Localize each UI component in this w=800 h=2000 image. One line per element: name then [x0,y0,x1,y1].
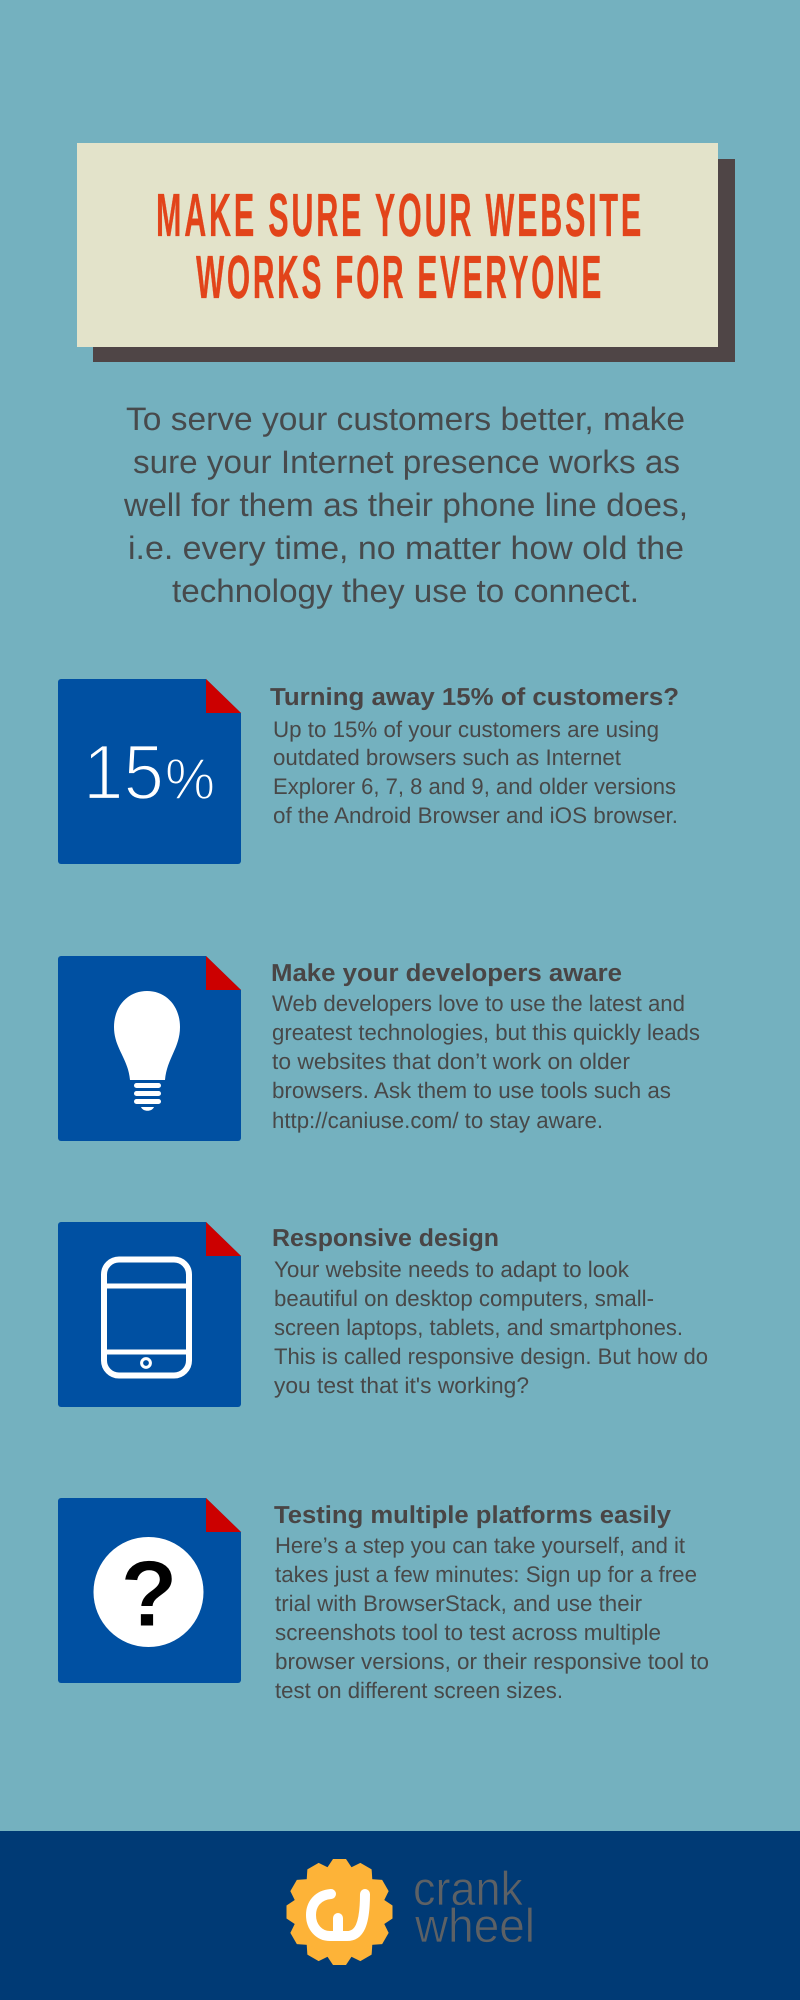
banner shadow [93,159,735,362]
panel: developers aware [58,956,700,1141]
intro text: i.e. every time, no matter how old the [128,530,684,566]
panel: turning away 15% [58,679,679,864]
body text: browser versions, or their responsive tool to [275,1649,709,1674]
heading: Testing multiple platforms easily [274,1502,671,1529]
body text: Here’s a step you can take yourself, and it [275,1533,686,1558]
document card with question mark: ? [120,1541,178,1646]
logo wordmark [413,1863,535,1953]
intro text: To serve your customers better, make [126,401,685,437]
banner panel [77,143,718,347]
heading: Make your developers aware [271,960,622,987]
body text: to websites that don’t work on older [272,1049,631,1074]
intro text [123,401,688,609]
body text: outdated browsers such as Internet [273,745,622,770]
heading: Turning away 15% of customers? [270,684,679,711]
body text: screenshots tool to test across multiple [275,1620,661,1645]
body text: test on different screen sizes. [275,1678,563,1703]
body text [275,1533,709,1703]
body text: Explorer 6, 7, 8 and 9, and older versions [273,774,676,799]
body text: greatest technologies, but this quickly leads [272,1020,700,1045]
footer band [0,1831,800,2000]
icon: crankwheel gear logo [286,1859,392,1965]
body text: http://caniuse.com/ to stay aware. [272,1108,603,1133]
body text [274,1257,708,1398]
body text [273,717,678,828]
body text: trial with BrowserStack, and use their [275,1591,642,1616]
body text: screen laptops, tablets, and smartphones. [274,1315,683,1340]
panel: testing platforms [58,1498,709,1703]
intro text: technology they use to connect. [172,573,639,609]
body text: Your website needs to adapt to look [274,1257,630,1282]
body text: Up to 15% of your customers are using [273,717,659,742]
body text: browsers. Ask them to use tools such as [272,1078,671,1103]
document card with question mark [58,1498,241,1683]
title banner [77,143,735,362]
document card with 15% [58,679,241,864]
logo wordmark: wheel [414,1900,535,1953]
intro text: well for them as their phone line does, [123,487,688,523]
body text [272,991,700,1133]
logo wordmark: crank [413,1863,524,1916]
body text: Web developers love to use the latest and [272,991,685,1016]
panel: responsive design [58,1222,708,1407]
document card with light bulb [58,956,241,1141]
heading: Responsive design [272,1225,499,1252]
body text: you test that it's working? [274,1373,529,1398]
document card with tablet [58,1222,241,1407]
body text: of the Android Browser and iOS browser. [273,803,678,828]
document card with 15%: 15 [83,728,164,816]
body text: beautiful on desktop computers, small- [274,1286,654,1311]
body text: This is called responsive design. But how do [274,1344,708,1369]
body text: takes just a few minutes: Sign up for a free [275,1562,697,1587]
title text [156,181,644,311]
document card with 15%: % [165,747,215,812]
intro text: sure your Internet presence works as [133,444,680,480]
